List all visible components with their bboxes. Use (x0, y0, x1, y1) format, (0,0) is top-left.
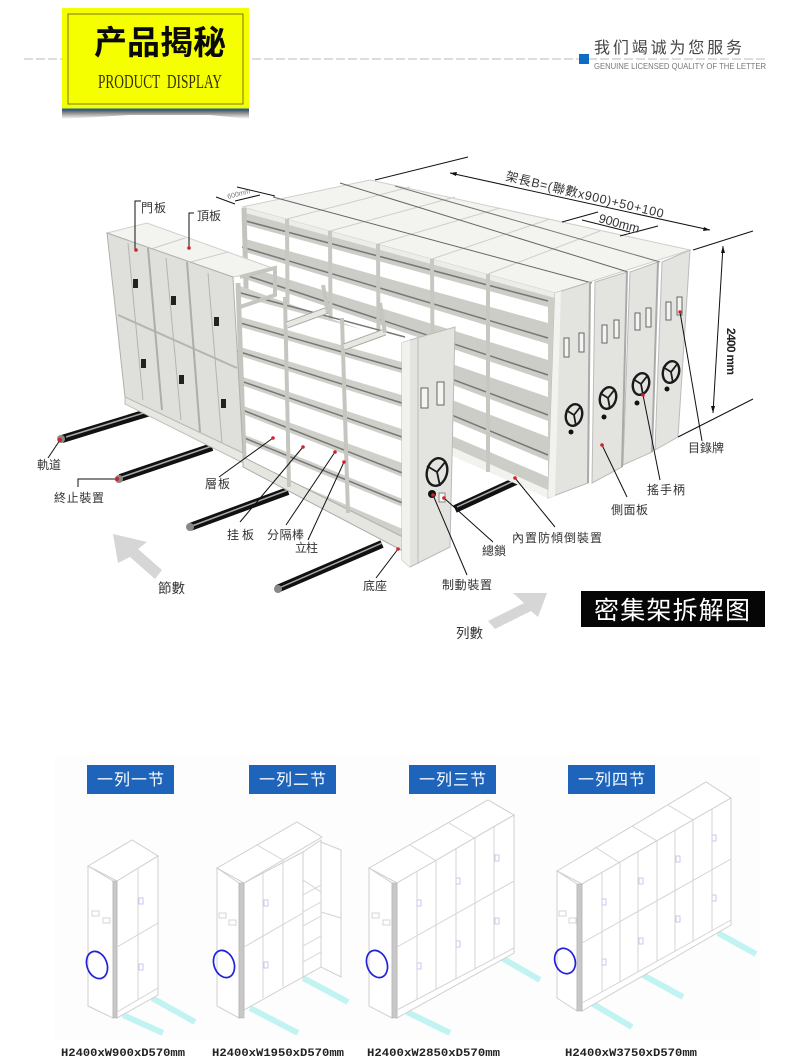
dimension: 600mm: 600mm (227, 188, 251, 201)
dimension: 900mm (562, 211, 658, 236)
rails (57, 411, 518, 593)
callout: 立柱: 立柱 (295, 540, 318, 555)
banner: exploded diagram title: 密集架拆解图 (594, 597, 750, 625)
callout: 分隔棒 (267, 450, 337, 542)
callout: 內置防傾倒裝置 (512, 476, 602, 545)
front cabinet with doors (107, 223, 275, 463)
caption: four sections size: H2400xW3750xD570mm (565, 1048, 697, 1060)
callout: 目錄牌 (678, 310, 724, 455)
callout: 終止裝置 (54, 477, 119, 505)
callout: 底座 (363, 547, 400, 593)
callout: 制動裝置: 制動裝置 (442, 578, 492, 592)
icon: hand wheels on back panels (563, 359, 682, 434)
tag: 一列一节: 一列一节 (97, 771, 164, 789)
callout: 頂板 (187, 209, 221, 250)
tag: 一列三节: 一列三节 (419, 771, 486, 789)
caption: three sections size: H2400xW2850xD570mm (367, 1048, 500, 1060)
caption: one section size: H2400xW900xD570mm (61, 1048, 185, 1060)
dimension: 600mm (216, 187, 275, 204)
dimension: shelf length: 架長B=(聯數x900)+50+100 (504, 169, 665, 221)
callout: 底座: 底座 (363, 578, 387, 593)
dimension: 2400 mm height: 2400 mm (724, 328, 738, 375)
cabinet: three sections (363, 800, 540, 1033)
callout: 立柱 (295, 460, 346, 555)
callout: 搖手柄: 搖手柄 (647, 483, 685, 497)
cabinet: one section (83, 840, 195, 1033)
header slogan: GENUINE LICENSED QUALITY OF THE LETTER (594, 61, 766, 71)
callout: 目錄牌: 目錄牌 (688, 440, 724, 455)
label: 節數: 節數 (158, 581, 185, 596)
dimension: shelf length (375, 157, 710, 231)
callout: 內置防傾倒裝置: 內置防傾倒裝置 (512, 530, 602, 545)
header badge: product display (62, 8, 249, 119)
panel: configuration row (55, 755, 760, 1060)
front open shelving (237, 283, 405, 552)
badge title: 产品揭秘 (94, 24, 226, 61)
callout: 終止裝置: 終止裝置 (54, 490, 104, 505)
callout: 搖手柄 (641, 393, 685, 497)
callout: 頂板: 頂板 (197, 209, 221, 223)
dimension: 2400 mm height (678, 231, 753, 437)
callout: 總鎖 (442, 496, 506, 558)
tag: 一列四节: 一列四节 (578, 771, 645, 789)
label: 列數: 列數 (456, 626, 483, 641)
front side panel (402, 327, 455, 567)
callout: 分隔棒: 分隔棒 (267, 528, 304, 542)
header slogan: 我们竭诚为您服务 (594, 39, 742, 57)
back unit side panels (548, 250, 690, 498)
exploded shelving diagram (37, 157, 765, 641)
arrow: columns direction (488, 593, 547, 629)
callout: 挂板 (227, 445, 305, 542)
badge subtitle: PRODUCT DISPLAY (98, 71, 222, 93)
cabinet: two sections (210, 822, 348, 1033)
callout: 側面板: 側面板 (611, 503, 648, 517)
tag: 一列一节 (87, 765, 174, 794)
callout: 側面板 (600, 443, 648, 517)
back shelving unit (242, 180, 690, 498)
header slogan (579, 39, 766, 71)
tag: 一列二节 (249, 765, 336, 794)
callout: 挂板: 挂板 (227, 528, 254, 542)
banner: exploded diagram title (581, 591, 765, 627)
callout: 軌道 (37, 438, 62, 472)
callout: 軌道: 軌道 (37, 457, 61, 472)
dimension: 900mm: 900mm (597, 211, 641, 236)
tag: 一列四节 (568, 765, 655, 794)
tag: 一列二节: 一列二节 (259, 771, 326, 789)
callout: 門板: 門板 (141, 201, 166, 215)
caption: two sections size: H2400xW1950xD570mm (212, 1048, 344, 1060)
callout: 總鎖: 總鎖 (482, 543, 506, 558)
callout: 制動裝置 (431, 493, 492, 592)
tag: 一列三节 (409, 765, 496, 794)
callout: 門板 (134, 201, 166, 252)
cabinet: four sections (551, 782, 756, 1027)
callout: 層板: 層板 (205, 477, 230, 491)
callout: 層板 (205, 436, 275, 491)
arrow: sections direction (113, 534, 162, 579)
